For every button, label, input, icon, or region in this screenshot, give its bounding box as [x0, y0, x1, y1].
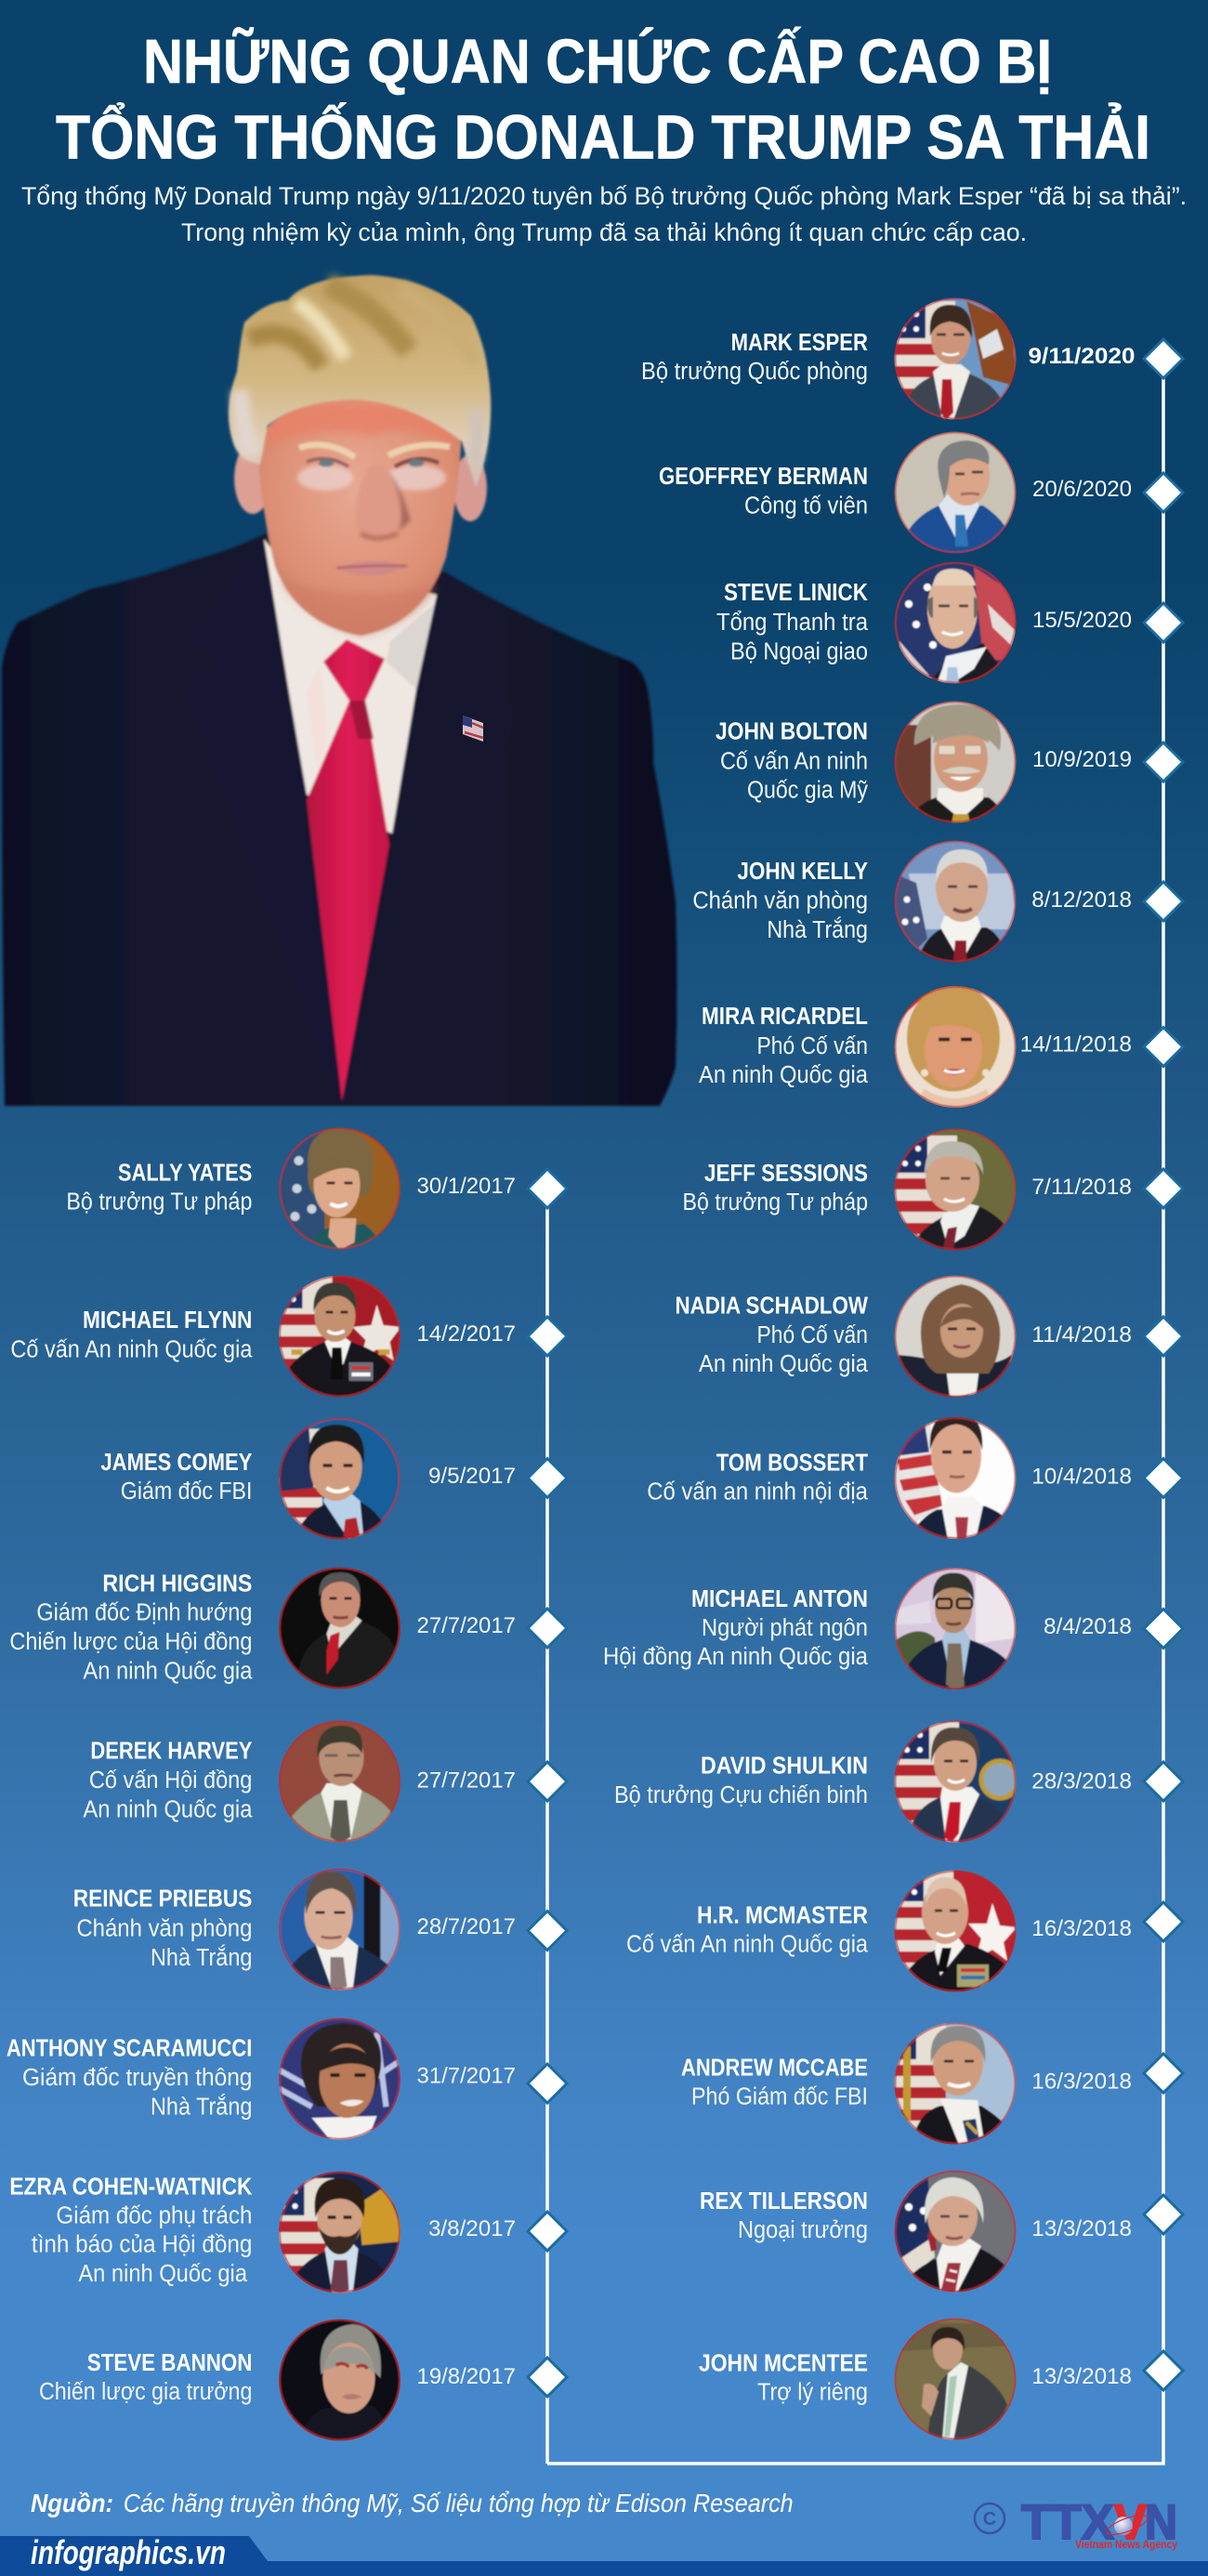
name and role: EZRA COHEN-WATNICK	[9, 2175, 253, 2201]
name and role	[699, 2351, 868, 2406]
footer site name: infographics.vn	[31, 2533, 226, 2571]
name and role: Quốc gia Mỹ	[747, 778, 868, 804]
name and role: DAVID SHULKIN	[701, 1754, 868, 1780]
logo: TTXVN	[975, 2495, 1177, 2551]
timeline marker	[1144, 603, 1183, 642]
logo: TTXVN: V	[1114, 2495, 1147, 2550]
portrait: Rich Higgins	[279, 1567, 401, 1689]
name and role	[641, 330, 868, 385]
row: Mira Ricardel	[699, 983, 1183, 1108]
name and role: An ninh Quốc gia	[78, 2261, 248, 2287]
row: Steve Linick	[716, 561, 1183, 684]
timeline marker	[528, 1911, 567, 1950]
name and role: Giám đốc phụ trách	[56, 2203, 252, 2229]
name and role: Giám đốc Định hướng	[36, 1600, 252, 1626]
portrait: Andrew McCabe	[894, 2022, 1017, 2145]
name and role	[626, 1903, 869, 1958]
timeline marker	[1144, 1169, 1183, 1208]
name and role	[83, 1739, 253, 1823]
name and role	[682, 1161, 868, 1216]
date: 11/4/2018	[1031, 1322, 1132, 1347]
right lapel	[347, 572, 514, 1102]
name and role: RICH HIGGINS	[102, 1571, 252, 1597]
timeline marker	[1144, 882, 1183, 921]
name and role	[10, 1308, 253, 1362]
portrait: Nadia Schadlow	[894, 1275, 1017, 1398]
intro text	[21, 182, 1187, 246]
row: Andrew McCabe	[681, 2022, 1183, 2145]
logo: TTXVN: Vietnam News Agency	[1075, 2538, 1177, 2551]
name and role: Tổng Thanh tra	[716, 610, 869, 636]
portrait: Anthony Scaramucci	[279, 2017, 401, 2140]
date: 30/1/2017	[416, 1174, 516, 1199]
row: James Comey	[100, 1417, 567, 1540]
date: 31/7/2017	[416, 2064, 516, 2089]
tie	[307, 639, 389, 1101]
date: 28/3/2018	[1031, 1769, 1132, 1794]
source note: Các hãng truyền thông Mỹ, Số liệu tổng hợp từ Edison Research	[124, 2489, 794, 2517]
date: 15/5/2020	[1032, 608, 1132, 633]
name and role: Giám đốc FBI	[121, 1479, 252, 1505]
portrait: John Kelly	[894, 840, 1017, 963]
name and role: Chiến lược gia trưởng	[39, 2379, 252, 2405]
name and role: MICHAEL FLYNN	[83, 1308, 252, 1334]
date: 9/11/2020	[1028, 344, 1136, 369]
portrait: Reince Priebus	[279, 1868, 401, 1991]
timeline marker	[1144, 2195, 1183, 2234]
date: 13/3/2018	[1031, 2364, 1132, 2389]
name and role: Chánh văn phòng	[76, 1916, 252, 1942]
row: Michael Anton	[603, 1567, 1183, 1689]
timeline marker	[528, 1459, 567, 1498]
footer band	[0, 2536, 1208, 2576]
timeline marker	[1144, 1028, 1183, 1067]
timeline marker	[528, 1609, 567, 1648]
name and role: JOHN KELLY	[737, 859, 868, 885]
name and role: Người phát ngôn	[702, 1615, 868, 1641]
timeline marker	[1144, 1902, 1183, 1941]
row: Michael Flynn	[10, 1271, 567, 1398]
portrait: Mark Esper	[888, 297, 1017, 424]
name and role: Bộ trưởng Tư pháp	[682, 1189, 868, 1216]
portrait: Geoffrey Berman	[894, 431, 1017, 554]
name and role: Nhà Trắng	[151, 1944, 252, 1971]
name and role	[659, 464, 868, 519]
name and role: STEVE LINICK	[724, 580, 869, 606]
name and role: An ninh Quốc gia	[699, 1062, 869, 1088]
portrait: Tom Bossert	[894, 1413, 1017, 1539]
timeline line: right and bottom	[547, 359, 1163, 2464]
name and role: TOM BOSSERT	[716, 1450, 868, 1476]
timeline marker	[1144, 1610, 1183, 1649]
portrait: Michael Flynn	[279, 1275, 400, 1398]
timeline marker	[528, 2358, 567, 2397]
row: Tom Bossert	[647, 1413, 1183, 1539]
portrait: James Comey	[279, 1418, 400, 1539]
timeline marker	[1144, 2351, 1183, 2390]
date: 10/9/2019	[1032, 747, 1132, 772]
name and role	[100, 1450, 252, 1505]
title	[56, 27, 1150, 173]
timeline marker	[1144, 339, 1183, 378]
name and role: Chiến lược của Hội đồng	[9, 1629, 252, 1655]
shirt	[264, 539, 437, 834]
intro text: Tổng thống Mỹ Donald Trump ngày 9/11/2020 tuyên bố Bộ trưởng Quốc phòng Mark Esper “đã bị sa thải”.	[21, 182, 1187, 210]
date: 19/8/2017	[416, 2364, 516, 2389]
row: John Bolton	[716, 701, 1183, 823]
name and role: An ninh Quốc gia	[699, 1351, 869, 1377]
timeline marker	[528, 1317, 567, 1356]
name and role	[73, 1886, 252, 1971]
portrait: Derek Harvey	[279, 1720, 401, 1843]
left lapel	[180, 533, 338, 1102]
name and role	[647, 1450, 869, 1505]
name and role	[9, 2175, 253, 2287]
date: 13/3/2018	[1031, 2216, 1132, 2241]
date: 16/3/2018	[1031, 2070, 1132, 2095]
logo: TTXVN: C	[983, 2509, 996, 2530]
name and role: JEFF SESSIONS	[704, 1161, 868, 1187]
date: 20/6/2020	[1032, 477, 1132, 502]
name and role: Giám đốc truyền thông	[22, 2065, 252, 2091]
name and role: Chánh văn phòng	[692, 888, 868, 914]
row: David Shulkin	[614, 1720, 1183, 1845]
row: Rich Higgins	[9, 1567, 567, 1689]
name and role: MARK ESPER	[731, 330, 868, 356]
row: John McEntee	[699, 2318, 1183, 2440]
portrait: Michael Anton	[894, 1567, 1017, 1689]
logo: TTXVN: TTX	[1021, 2495, 1114, 2550]
name and role: MICHAEL ANTON	[691, 1586, 868, 1612]
row: H.R. McMaster	[626, 1864, 1183, 1992]
date: 10/4/2018	[1031, 1464, 1132, 1489]
row: Nadia Schadlow	[675, 1275, 1183, 1398]
name and role: tình báo của Hội đồng	[32, 2232, 252, 2258]
date: 16/3/2018	[1031, 1916, 1132, 1941]
name and role: Nhà Trắng	[767, 916, 868, 943]
name and role	[692, 859, 868, 943]
name and role	[603, 1586, 869, 1670]
name and role	[39, 2350, 252, 2405]
name and role: Bộ trưởng Tư pháp	[66, 1189, 252, 1216]
name and role	[716, 580, 869, 665]
name and role: ANTHONY SCARAMUCCI	[7, 2036, 252, 2062]
date: 28/7/2017	[416, 1914, 516, 1939]
date: 9/5/2017	[428, 1464, 516, 1489]
portrait: H.R. McMaster	[894, 1870, 1017, 1992]
row: Rex Tillerson	[700, 2170, 1183, 2293]
name and role	[700, 2188, 868, 2243]
name and role: Bộ trưởng Cựu chiến binh	[614, 1782, 868, 1808]
portrait: John Bolton	[894, 701, 1017, 823]
portrait: Donald Trump	[2, 275, 676, 1106]
name and role: JOHN BOLTON	[716, 719, 868, 745]
row: Derek Harvey	[83, 1720, 567, 1843]
name and role: REINCE PRIEBUS	[73, 1886, 252, 1912]
intro text: Trong nhiệm kỳ của mình, ông Trump đã sa thải không ít quan chức cấp cao.	[181, 218, 1027, 246]
name and role: Phó Cố vấn	[756, 1322, 868, 1348]
name and role: Trợ lý riêng	[757, 2380, 868, 2406]
timeline marker	[1144, 1459, 1183, 1498]
row: Ezra Cohen-Watnick	[9, 2171, 567, 2301]
ears	[234, 443, 271, 514]
name and role: Phó Cố vấn	[756, 1033, 868, 1059]
timeline marker	[1144, 473, 1183, 512]
portrait: John McEntee	[894, 2318, 1017, 2440]
hair	[229, 275, 491, 488]
name and role: DEREK HARVEY	[90, 1739, 252, 1765]
row: Anthony Scaramucci	[7, 2017, 567, 2140]
name and role: Bộ Ngoại giao	[730, 639, 868, 665]
date: 8/12/2018	[1031, 887, 1132, 913]
timeline line: left	[545, 1189, 549, 2464]
name and role: STEVE BANNON	[87, 2350, 252, 2376]
name and role	[66, 1160, 252, 1216]
suit	[2, 533, 676, 1106]
name and role: Ngoại trưởng	[738, 2217, 868, 2243]
name and role: JOHN MCENTEE	[699, 2351, 868, 2377]
timeline marker	[1144, 1762, 1183, 1801]
name and role: Nhà Trắng	[151, 2093, 252, 2121]
name and role	[681, 2056, 868, 2110]
name and role	[9, 1571, 253, 1684]
name and role: ANDREW MCCABE	[681, 2056, 868, 2082]
portrait: Mira Ricardel	[894, 983, 1017, 1108]
timeline marker	[1144, 2054, 1183, 2093]
row: Jeff Sessions	[682, 1128, 1183, 1258]
portrait: Steve Linick	[894, 561, 1017, 684]
date: 8/4/2018	[1044, 1614, 1132, 1639]
name and role	[675, 1294, 869, 1377]
title: NHỮNG QUAN CHỨC CẤP CAO BỊ	[143, 27, 1052, 97]
date: 27/7/2017	[416, 1613, 516, 1638]
timeline marker	[1144, 1317, 1183, 1356]
date: 14/2/2017	[416, 1321, 516, 1347]
face	[257, 392, 462, 636]
name and role: JAMES COMEY	[100, 1450, 252, 1476]
source note: Nguồn:	[31, 2489, 113, 2517]
portrait: Ezra Cohen-Watnick	[268, 2171, 401, 2301]
name and role	[699, 1004, 869, 1088]
date: 27/7/2017	[416, 1768, 516, 1794]
name and role: Cố vấn Hội đồng	[89, 1768, 252, 1794]
facial features	[297, 464, 446, 538]
name and role: Cố vấn An ninh Quốc gia	[10, 1336, 253, 1362]
name and role	[716, 719, 868, 804]
date: 3/8/2017	[428, 2216, 516, 2241]
row: Geoffrey Berman	[659, 431, 1183, 554]
name and role: Cố vấn An ninh Quốc gia	[626, 1932, 869, 1958]
name and role: SALLY YATES	[118, 1160, 252, 1186]
portrait: Jeff Sessions	[890, 1128, 1017, 1258]
row: Mark Esper	[641, 297, 1183, 424]
timeline marker	[528, 2064, 567, 2103]
portrait: Rex Tillerson	[894, 2170, 1017, 2293]
name and role: An ninh Quốc gia	[83, 1797, 253, 1823]
timeline marker	[528, 1169, 567, 1208]
portrait: Steve Bannon	[279, 2319, 401, 2441]
name and role: GEOFFREY BERMAN	[659, 464, 868, 490]
name and role: NADIA SCHADLOW	[675, 1294, 869, 1320]
name and role: Cố vấn An ninh	[720, 749, 868, 775]
timeline marker	[1144, 743, 1183, 782]
icon: flag lapel pin	[463, 716, 483, 742]
portrait: David Shulkin	[892, 1720, 1018, 1845]
name and role	[614, 1754, 868, 1808]
row: Sally Yates	[66, 1127, 567, 1250]
portrait: Sally Yates	[279, 1127, 401, 1250]
logo: TTXVN: N	[1145, 2495, 1177, 2550]
name and role: Bộ trưởng Quốc phòng	[641, 359, 868, 385]
timeline marker	[528, 2212, 567, 2251]
name and role: REX TILLERSON	[700, 2188, 868, 2215]
timeline marker	[528, 1762, 567, 1801]
date: 14/11/2018	[1020, 1032, 1132, 1058]
name and role	[7, 2036, 252, 2121]
name and role: Phó Giám đốc FBI	[691, 2084, 868, 2110]
name and role: MIRA RICARDEL	[702, 1004, 868, 1030]
row: Reince Priebus	[73, 1868, 567, 1991]
name and role: H.R. MCMASTER	[697, 1903, 868, 1929]
row: John Kelly	[692, 840, 1183, 963]
row: Steve Bannon	[39, 2319, 567, 2441]
name and role: Công tố viên	[744, 493, 868, 519]
date: 7/11/2018	[1031, 1175, 1132, 1200]
name and role: Cố vấn an ninh nội địa	[647, 1479, 869, 1505]
name and role: Hội đồng An ninh Quốc gia	[603, 1644, 869, 1670]
name and role: An ninh Quốc gia	[83, 1658, 253, 1684]
